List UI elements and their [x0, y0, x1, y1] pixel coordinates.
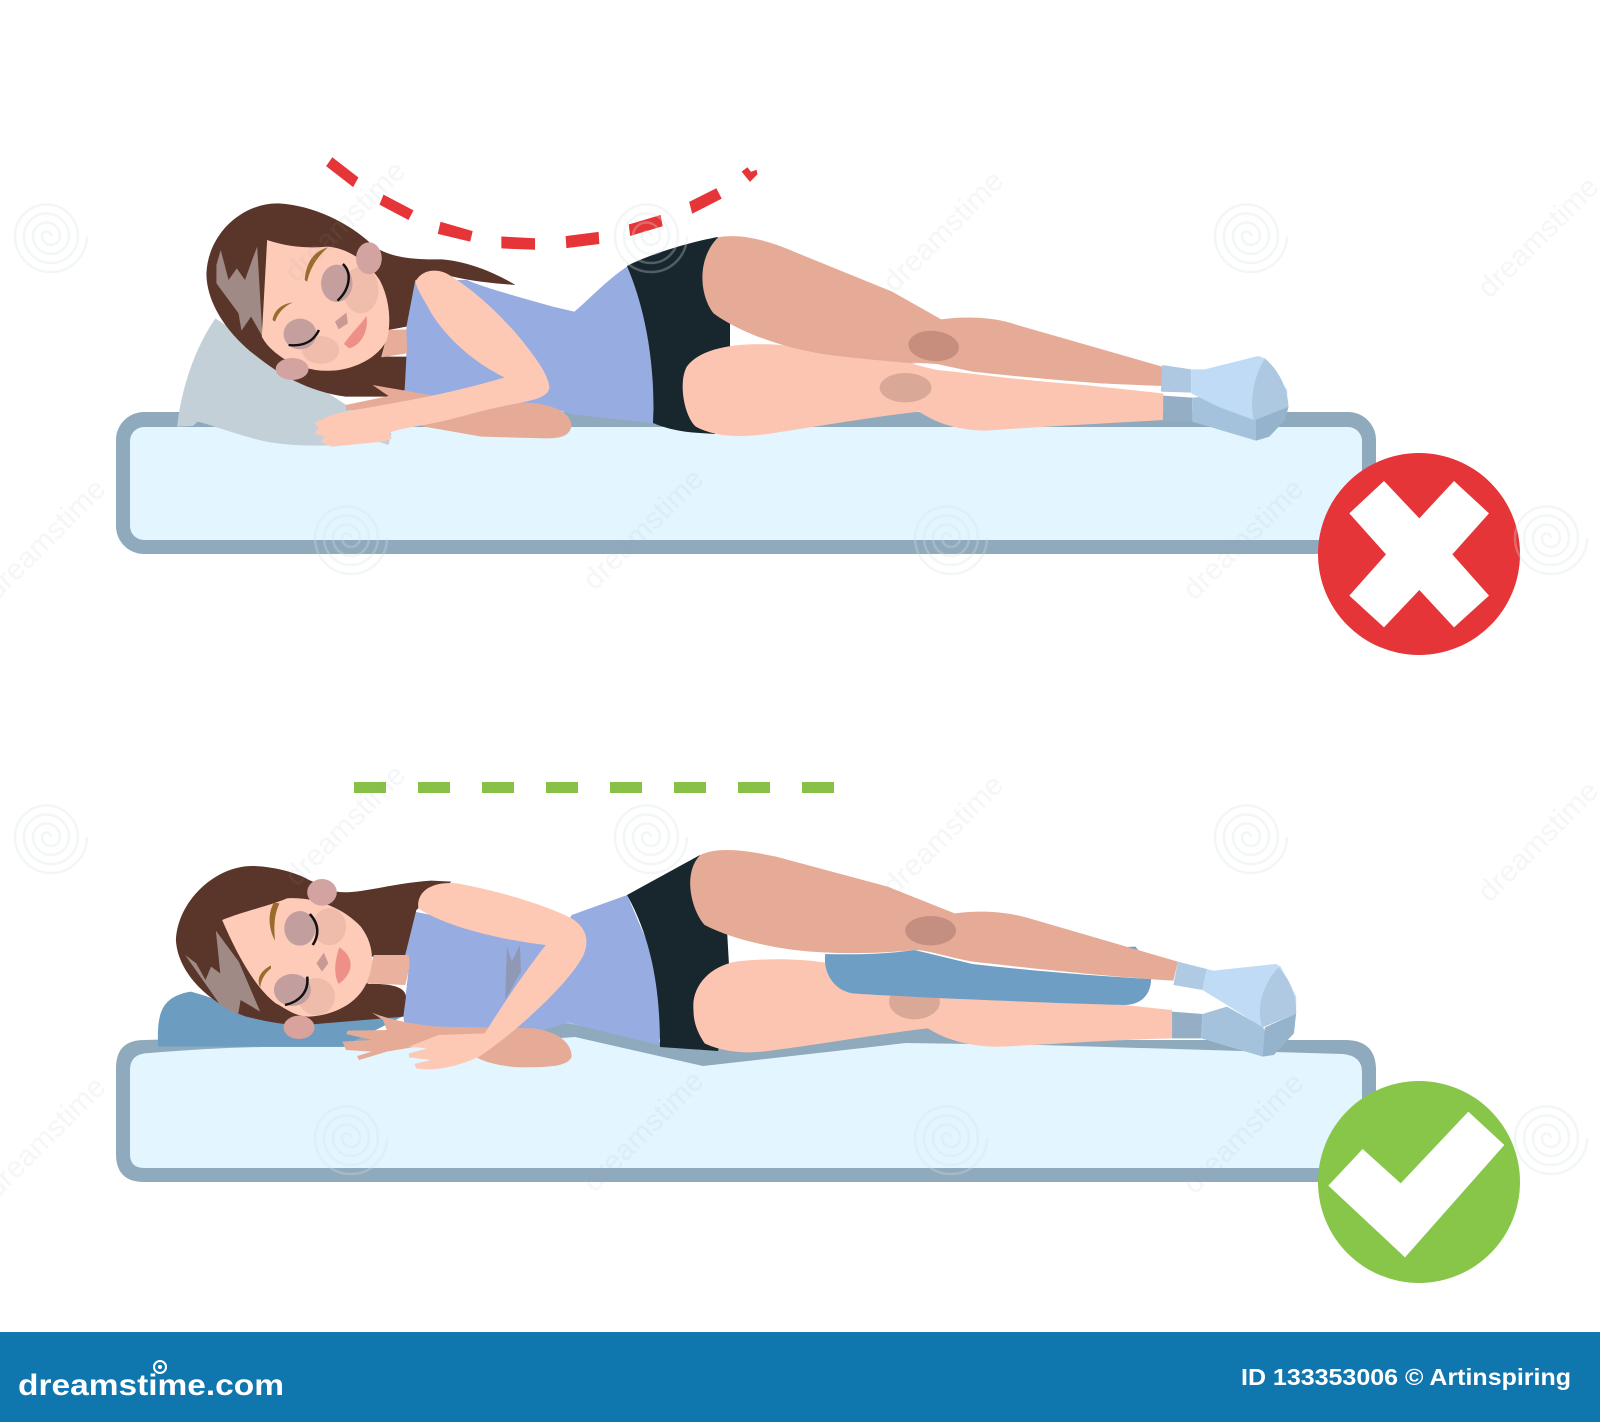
watermark text: dreamstime	[1176, 1066, 1310, 1200]
knee pillow	[825, 947, 1151, 1005]
shorts	[627, 237, 730, 434]
watermark text: dreamstime	[576, 462, 710, 596]
orthopedic neck pillow	[158, 988, 402, 1047]
hair	[206, 203, 515, 397]
shirt	[403, 895, 662, 1045]
footer image id and author: ID 133353006 © Artinspiring	[1241, 1364, 1571, 1390]
forearm and hand behind	[346, 385, 571, 438]
watermark spirals	[15, 204, 1587, 1174]
mattress: top, too soft	[116, 412, 1376, 554]
watermark text: dreamstime	[576, 1064, 710, 1198]
shirt fold	[505, 945, 521, 1000]
hair highlight	[216, 247, 262, 337]
socks	[1172, 1012, 1202, 1038]
lower leg	[683, 236, 1289, 441]
face	[262, 240, 389, 380]
legs and bolster	[690, 850, 1296, 1057]
upper leg	[690, 850, 1178, 981]
watermark text: dreamstime	[1176, 472, 1310, 606]
spine line: green straight dashes	[354, 782, 834, 793]
socks	[1163, 396, 1192, 422]
hair	[176, 866, 451, 1025]
mattress: bottom, supportive	[116, 1023, 1376, 1182]
woman: correct posture	[158, 850, 1296, 1069]
watermark text: dreamstime	[278, 154, 412, 288]
footer bar	[0, 1332, 1600, 1422]
forearm and hand behind	[342, 1013, 572, 1067]
woman: wrong posture	[177, 203, 1289, 447]
spine line: red curved dashes	[327, 158, 757, 249]
face	[222, 879, 372, 1039]
neck	[366, 955, 410, 985]
watermark text	[0, 154, 1600, 1204]
arm and front hand	[409, 883, 586, 1069]
green circle with check mark	[1318, 1081, 1520, 1283]
shorts	[627, 855, 731, 1051]
neck	[381, 329, 407, 357]
red circle with cross	[1318, 453, 1520, 655]
pillow: soft grey	[177, 318, 391, 446]
watermark text: dreamstime	[876, 768, 1010, 902]
arm and front hand	[314, 271, 549, 447]
footer logo text: dreamstime.com	[18, 1369, 284, 1402]
upper leg	[702, 236, 1162, 387]
shirt	[403, 266, 655, 423]
hair highlight	[185, 931, 260, 1015]
watermark text: dreamstime	[278, 758, 412, 892]
watermark text: dreamstime	[876, 164, 1010, 298]
